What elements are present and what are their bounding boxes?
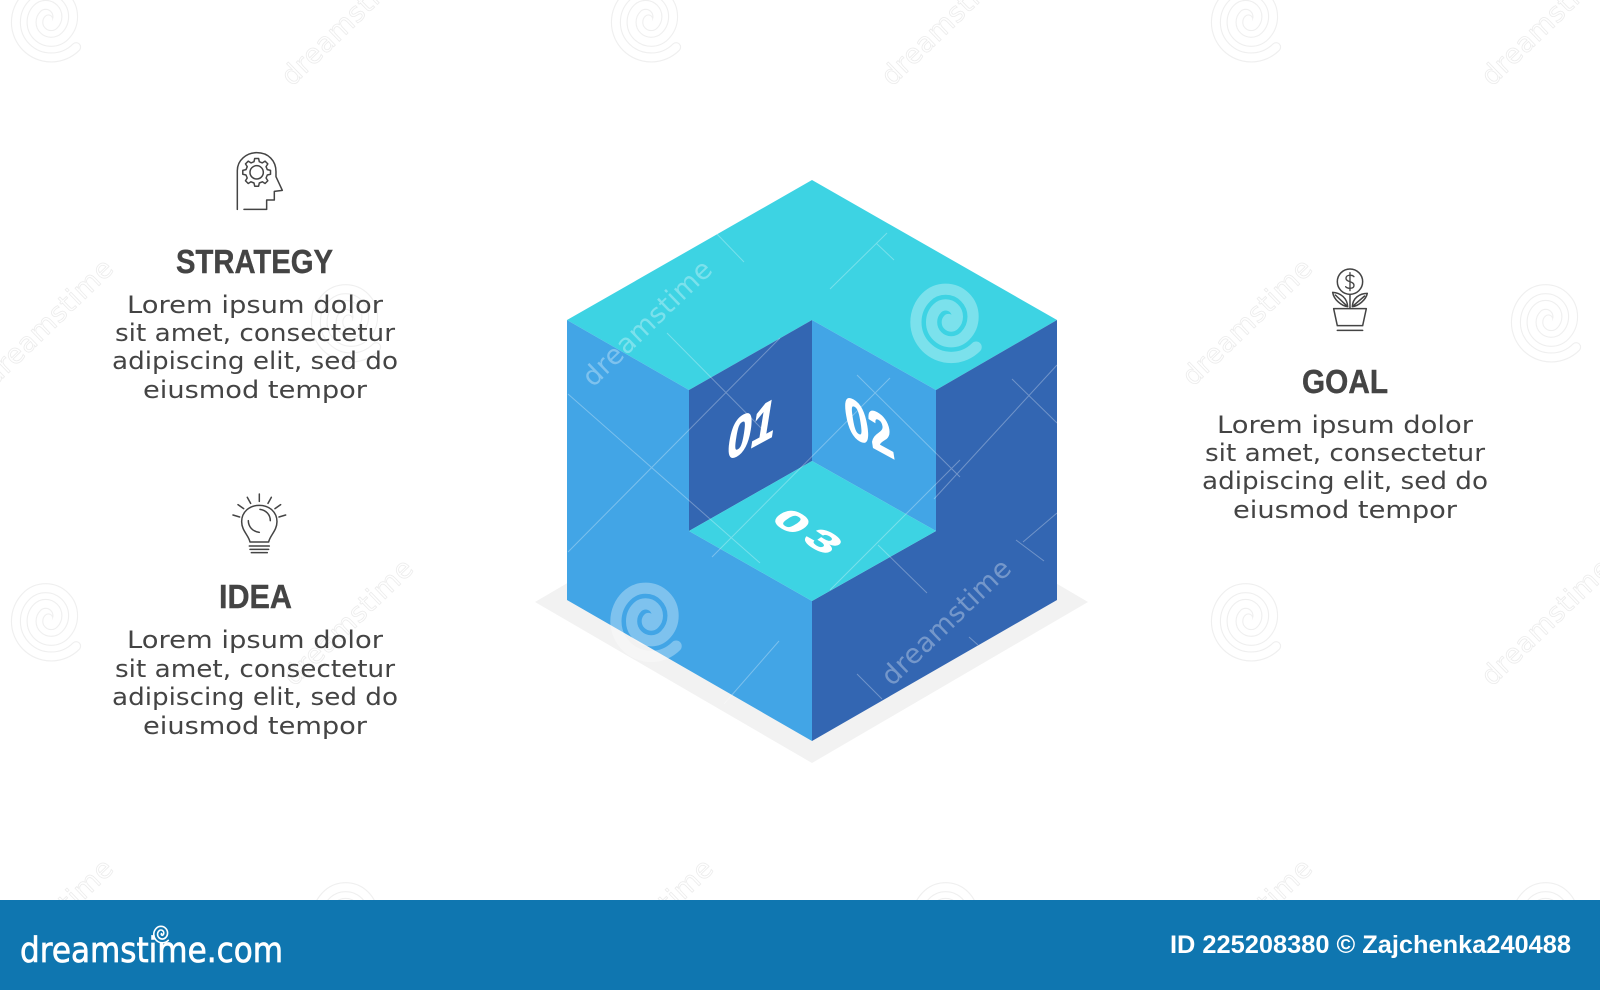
number 01: 01: [723, 385, 781, 475]
text block: idea: [112, 626, 398, 740]
text block: idea: Lorem ipsum dolor: [127, 626, 383, 654]
isometric cube: [567, 180, 1057, 741]
panel: strategy: [112, 153, 398, 404]
footer banner: [0, 900, 1600, 990]
logo text: dreamstime.com: [20, 931, 283, 971]
text block: goal: sit amet, consectetur: [1205, 439, 1485, 467]
text block: idea: adipiscing elit, sed do: [112, 683, 398, 711]
watermark over cube: [568, 233, 1057, 704]
watermark over cube: dreamstime: [875, 553, 1018, 692]
watermark pattern on white: dreamstime: [1176, 853, 1319, 990]
inner wall 01: [689, 320, 812, 531]
heading: strategy: STRATEGY: [176, 243, 333, 280]
cube ground shadow: [535, 440, 1088, 763]
text block: goal: adipiscing elit, sed do: [1202, 467, 1488, 495]
text block: strategy: [112, 291, 398, 404]
number 02: 02: [840, 382, 898, 473]
number 03: 03: [763, 503, 858, 563]
panel: idea: [112, 494, 398, 740]
panel: goal: [1202, 269, 1488, 524]
cube right face: [812, 320, 1057, 741]
watermark over cube: dreamstime: [576, 254, 719, 393]
text block: idea: sit amet, consectetur: [115, 655, 395, 683]
image credit: ID 225208380 © Zajchenka240488: [1170, 931, 1571, 959]
text block: goal: eiusmod tempor: [1233, 496, 1457, 524]
heading: goal: GOAL: [1302, 363, 1388, 400]
text block: strategy: adipiscing elit, sed do: [112, 347, 398, 375]
text block: goal: [1202, 411, 1488, 524]
text block: strategy: sit amet, consectetur: [115, 319, 395, 347]
icon: money plant: [1333, 269, 1367, 330]
cube left face: [567, 320, 812, 741]
cube top face: [567, 180, 1057, 390]
inner floor 03: [689, 461, 936, 601]
heading: idea: IDEA: [219, 578, 292, 615]
watermark pattern on white: dreamstime: [577, 853, 720, 990]
text block: idea: eiusmod tempor: [143, 712, 367, 740]
watermark pattern on white: dreamstime: [277, 553, 420, 692]
icon: logo spiral: [150, 924, 173, 946]
text block: goal: Lorem ipsum dolor: [1217, 411, 1473, 439]
text block: strategy: eiusmod tempor: [143, 376, 367, 404]
icon: head with gear: [237, 153, 282, 209]
watermark pattern on white: dreamstime: [1176, 253, 1319, 392]
icon: light bulb: [233, 494, 286, 553]
inner wall 02: [812, 320, 936, 531]
text block: strategy: Lorem ipsum dolor: [127, 291, 383, 319]
